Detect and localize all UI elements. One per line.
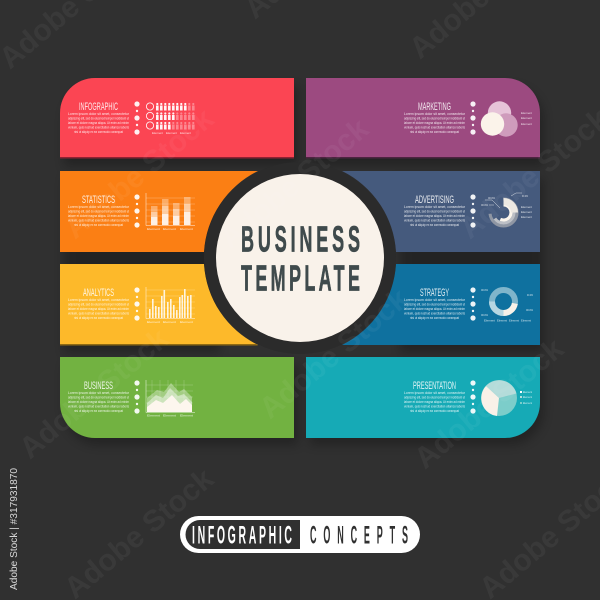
bullet dots: strategy — [470, 287, 476, 321]
text block: advertising: labore et dolore magna aliqua. Ut enim ad minim — [404, 214, 465, 218]
chart: pie chart: Element — [523, 402, 532, 405]
chart: paired bar chart — [146, 287, 195, 324]
panel shadows — [64, 86, 544, 445]
panel: analytics (yellow) — [60, 264, 258, 346]
chart: paired bar chart: Element — [180, 321, 193, 324]
text block: presentation: Lorem ipsum dolor sit amet, consectetur — [404, 391, 466, 395]
text block: infographic — [68, 112, 130, 134]
text block: marketing: Lorem ipsum dolor sit amet, consectetur — [404, 112, 466, 116]
text block: advertising: Lorem ipsum dolor sit amet, consectetur — [404, 205, 466, 209]
chart: radial ring chart — [481, 193, 532, 226]
text block: presentation: adipiscing elit, sed do eiusmod tempor incididunt ut — [404, 396, 465, 400]
heading: presentation: PRESENTATION — [413, 380, 456, 392]
chart: donut chart: 00.0% — [526, 309, 534, 312]
heading: strategy: STRATEGY — [420, 287, 449, 299]
bullet dots: analytics — [134, 287, 140, 321]
chart: donut chart: Element — [521, 320, 531, 322]
text block: strategy: labore et dolore magna aliqua. Ut enim ad minim — [404, 307, 465, 311]
text block: business: Lorem ipsum dolor sit amet, consectetur — [68, 391, 130, 395]
text block: infographic: Lorem ipsum dolor sit amet, consectetur — [68, 112, 130, 116]
watermark: Adobe Stock — [213, 112, 375, 255]
chart: donut chart: Element — [484, 320, 495, 322]
text block: strategy: adipiscing elit, sed do eiusmod tempor incididunt ut — [404, 302, 465, 306]
text block: statistics: veniam, quis nostrud exercitation ullamco laboris — [68, 218, 129, 222]
chart: donut chart: 00.0% — [481, 314, 489, 317]
chart: area chart: Element — [180, 414, 193, 418]
chart: pie chart: Element — [523, 391, 532, 394]
chart: radial ring chart: 00.0% — [481, 204, 489, 207]
heading: statistics: STATISTICS — [82, 194, 115, 206]
text block: statistics: nisi ut aliquip ex ea commodo consequat — [74, 223, 123, 227]
text block: presentation — [404, 391, 466, 413]
stock id credit: Adobe Stock | #317931870 — [8, 468, 20, 590]
panel: infographic (red) — [60, 78, 294, 158]
text block: advertising — [404, 205, 466, 227]
panel: advertising (navy) — [342, 171, 540, 252]
chart: donut chart: Element — [497, 320, 507, 322]
watermark: Adobe Stock — [13, 322, 175, 465]
chart: paired bar chart: Element — [163, 321, 176, 324]
panel: marketing (purple) — [306, 78, 540, 158]
text block: business: adipiscing elit, sed do eiusmod tempor incididunt ut — [68, 396, 129, 400]
heading: analytics: ANALYTICS — [83, 287, 114, 299]
chart: stacked bar chart: Element — [163, 228, 176, 231]
chart: area chart — [146, 380, 195, 418]
bullet dots: statistics — [134, 194, 140, 228]
text block: analytics: veniam, quis nostrud exercitation ullamco laboris — [68, 312, 129, 316]
text block: strategy: Lorem ipsum dolor sit amet, consectetur — [404, 298, 466, 302]
heading: infographic: INFOGRAPHIC — [79, 101, 118, 113]
text block: marketing: labore et dolore magna aliqua. Ut enim ad minim — [404, 121, 465, 125]
title: business template — [241, 220, 360, 299]
text block: analytics: adipiscing elit, sed do eiusmod tempor incididunt ut — [68, 302, 129, 306]
text block: advertising: adipiscing elit, sed do eiusmod tempor incididunt ut — [404, 210, 465, 214]
text block: infographic: veniam, quis nostrud exercitation ullamco laboris — [68, 126, 129, 130]
chart: radial ring chart: 00.0% — [522, 195, 529, 198]
text block: strategy: nisi ut aliquip ex ea commodo consequat — [410, 316, 459, 320]
bullet dots: business — [134, 380, 140, 414]
text block: statistics — [68, 205, 130, 227]
center circle badge — [204, 162, 396, 354]
title: business template: TEMPLATE — [241, 259, 360, 299]
text block: advertising: nisi ut aliquip ex ea commodo consequat — [410, 223, 459, 227]
chart: venn diagram: Element — [521, 112, 532, 115]
chart: radial ring chart: Element — [521, 206, 532, 209]
chart: donut chart: 00.0% — [527, 294, 534, 297]
chart: radial ring chart: Element — [521, 211, 532, 214]
text block: statistics: adipiscing elit, sed do eiusmod tempor incididunt ut — [68, 210, 129, 214]
banner: infographic concepts — [180, 516, 420, 553]
chart: donut chart — [481, 289, 534, 322]
heading: advertising: ADVERTISING — [415, 194, 454, 206]
chart: donut chart: 00.0% — [481, 289, 489, 292]
chart: venn diagram — [481, 101, 532, 137]
bullet dots: infographic — [134, 101, 140, 135]
chart: stacked bar chart: Element — [180, 228, 193, 231]
watermark: Adobe Stock — [253, 282, 415, 425]
panel: statistics (orange) — [60, 171, 258, 252]
chart: people pictogram: Element — [166, 132, 177, 135]
bullet dots: advertising — [470, 194, 476, 228]
text block: analytics — [68, 298, 130, 320]
heading: marketing: MARKETING — [418, 101, 451, 113]
chart: venn diagram: Element — [521, 117, 532, 120]
text block: presentation: labore et dolore magna aliqua. Ut enim ad minim — [404, 400, 465, 404]
chart: pie chart — [481, 380, 532, 416]
banner: infographic concepts: INFOGRAPHIC — [192, 523, 292, 550]
text block: analytics: nisi ut aliquip ex ea commodo consequat — [74, 316, 123, 320]
text block: infographic: labore et dolore magna aliqua. Ut enim ad minim — [68, 121, 129, 125]
text block: business: nisi ut aliquip ex ea commodo consequat — [74, 409, 123, 413]
text block: advertising: veniam, quis nostrud exercitation ullamco laboris — [404, 218, 465, 222]
chart: people pictogram: Element — [152, 132, 163, 135]
chart: stacked bar chart: Element — [147, 228, 160, 231]
text block: presentation: nisi ut aliquip ex ea commodo consequat — [410, 409, 459, 413]
banner: infographic concepts: CONCEPTS — [310, 521, 408, 549]
watermark: Adobe Stock — [408, 332, 570, 475]
heading: business: BUSINESS — [84, 380, 113, 392]
text block: strategy: veniam, quis nostrud exercitation ullamco laboris — [404, 312, 465, 316]
watermark: Adobe Stock — [58, 102, 220, 245]
chart: pie chart: Element — [523, 396, 532, 399]
bullet dots: marketing — [470, 101, 476, 135]
text block: business: veniam, quis nostrud exercitation ullamco laboris — [68, 404, 129, 408]
title: business template: BUSINESS — [241, 220, 360, 260]
chart: stacked bar chart — [146, 193, 195, 231]
text block: marketing: adipiscing elit, sed do eiusmod tempor incididunt ut — [404, 116, 465, 120]
text block: presentation: veniam, quis nostrud exercitation ullamco laboris — [404, 404, 465, 408]
text block: analytics: labore et dolore magna aliqua. Ut enim ad minim — [68, 307, 129, 311]
chart: radial ring chart: 00.0% — [488, 197, 496, 200]
panel: strategy (blue) — [342, 264, 540, 345]
chart: area chart: Element — [163, 414, 176, 418]
text block: infographic: adipiscing elit, sed do eiusmod tempor incididunt ut — [68, 116, 129, 120]
text block: analytics: Lorem ipsum dolor sit amet, consectetur — [68, 298, 130, 302]
chart: donut chart: Element — [509, 320, 519, 322]
text block: marketing: nisi ut aliquip ex ea commodo consequat — [410, 130, 459, 134]
chart: paired bar chart: Element — [147, 321, 160, 324]
chart: venn diagram: Element — [521, 123, 532, 126]
chart: people pictogram: Element — [180, 132, 191, 135]
text block: statistics: Lorem ipsum dolor sit amet, consectetur — [68, 205, 130, 209]
text block: infographic: nisi ut aliquip ex ea commodo consequat — [74, 130, 123, 134]
text block: marketing: veniam, quis nostrud exercitation ullamco laboris — [404, 126, 465, 130]
chart: area chart: Element — [147, 414, 160, 418]
text block: business: labore et dolore magna aliqua. Ut enim ad minim — [68, 400, 129, 404]
text block: business — [68, 391, 130, 413]
text block: strategy — [404, 298, 466, 320]
text block: statistics: labore et dolore magna aliqua. Ut enim ad minim — [68, 214, 129, 218]
bullet dots: presentation — [470, 380, 476, 414]
chart: radial ring chart: Element — [521, 216, 532, 219]
panel: presentation (teal) — [306, 357, 540, 438]
chart: people pictogram — [146, 103, 196, 135]
text block: marketing — [404, 112, 466, 134]
panel: business (green) — [60, 357, 294, 438]
